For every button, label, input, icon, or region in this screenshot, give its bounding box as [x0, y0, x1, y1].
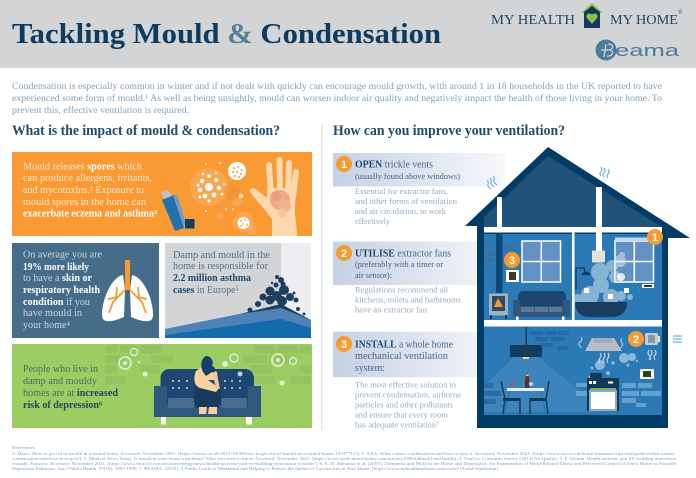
text: depression: People who live in	[23, 364, 98, 375]
logo: beama	[596, 40, 680, 60]
trickle vent	[615, 238, 654, 241]
pan	[590, 373, 602, 378]
step 1 heading: OPEN trickle vents	[355, 160, 433, 170]
text: asthma cases	[173, 250, 271, 296]
step 3 text	[355, 381, 461, 430]
step 2: utilise extractor fans: (preferably with a timer or	[355, 260, 443, 269]
text: skin or respiratory: respiratory health	[23, 285, 100, 296]
kitchen light cone	[484, 357, 605, 412]
text: spores: and mycotoxins.² Exposure to	[23, 185, 144, 196]
text: depression: damp and mouldy	[23, 376, 97, 387]
references: 1. Metro. How to get rid of mould in a rented home. Accessed: November 2021. [https://metro.co.uk/2021/10/30/how-to-get-rid-of-mould-in-a-rented-home-15537711/]; 2. AXA. What causes condensation and how to stop it. Accessed: November 2021. [https://www.axa.co.uk/home-insurance/tips-and-guides/what-causes-	[12, 451, 677, 456]
step 3 heading: system:	[355, 363, 385, 374]
text: spores: mould spores in the home can	[23, 197, 146, 208]
step 1 text: and air circulation, to work	[355, 207, 447, 216]
text: depression: risk of depression⁶	[23, 400, 102, 411]
logo: my health my home: ®	[678, 9, 683, 16]
step 2 heading: UTILISE extractor fans	[355, 249, 451, 260]
text: skin or respiratory: have mould in	[23, 308, 82, 319]
step 1 text: effectively	[355, 217, 391, 226]
lamp	[510, 327, 542, 359]
logo: my health my home: MY HEALTH	[491, 13, 575, 28]
text: depression	[23, 364, 118, 411]
text: spores: can produce allergens, irritants,	[23, 173, 152, 184]
references: crusade. Euractiv. Accessed: November 2021. [https://www.euractiv.com/section/energy/news/health-activists-join-eu-building-renovation-crusade/]; 6. E. D. Shenassa et al. (2007). Dampness and Mold in the Home and Depression: An Examination of Mold-Related Illness and Perceived Control of One's Home as Possible	[12, 461, 676, 466]
step 3 heading	[355, 340, 453, 374]
step 2 text	[355, 286, 461, 315]
oven	[587, 378, 619, 411]
thermostat	[640, 369, 654, 379]
illustration: mouldy roof	[165, 275, 311, 338]
badge 1	[336, 156, 352, 172]
badge 2	[336, 245, 352, 261]
step 2 text: kitchens, toilets and bathrooms	[355, 296, 461, 305]
dining set	[501, 373, 549, 415]
rooms	[484, 234, 662, 415]
references: References	[12, 445, 35, 450]
badge 3	[336, 336, 352, 352]
text: asthma cases: cases in Europe⁵	[173, 285, 239, 296]
sofa upper	[513, 291, 570, 320]
badges on house: 2	[633, 334, 639, 346]
logo: my health my home: MY HOME	[610, 13, 678, 28]
badge 3: 3	[341, 339, 347, 351]
step 2 text: Regulations recommend all	[355, 286, 449, 295]
icon: lungs	[102, 260, 153, 321]
heading: impact: What is the impact of mould & condensation?	[12, 123, 280, 139]
badges on house: 1	[652, 232, 658, 244]
step 3 text: has adequate ventilation⁷	[355, 421, 439, 430]
intro text: Condensation is especially common in winter and if not dealt with quickly can encourage mould growth, with around 1 in 18 households in the UK reported to have	[12, 81, 662, 92]
roof vents	[487, 167, 609, 189]
step 3 text: and ensure that every room	[355, 411, 449, 420]
text: skin or respiratory	[23, 250, 103, 331]
intro text: prevent this, effective ventilation is required.	[12, 105, 189, 116]
icon: hand with rash	[250, 160, 297, 236]
panel: 19% more likely blue	[12, 243, 159, 338]
badges on house: 3	[509, 255, 515, 267]
intro text	[12, 81, 662, 116]
right bricks	[576, 383, 661, 407]
icon: inhaler	[161, 190, 194, 231]
cooking steam	[588, 353, 638, 378]
logo: my health my home	[491, 3, 683, 28]
step 3 heading: INSTALL a whole home	[355, 340, 453, 351]
step 3: install mechanical ventilation	[333, 332, 505, 430]
step 2: utilise extractor fans	[333, 242, 505, 315]
text: spores	[23, 162, 157, 220]
house shell	[465, 147, 690, 428]
icon: person on sofa	[154, 356, 261, 424]
icon: house with heart	[581, 3, 603, 28]
bath steam	[572, 252, 633, 313]
bricks	[105, 345, 311, 384]
intro text: experienced some form of mould.¹ As well as being unsightly, mould can worsen indoor air quality and negatively impact the health of those living in your home. To	[12, 93, 662, 104]
badge 2: 2	[341, 248, 347, 260]
references: condensation-and-how-to-stop-it/]; 3. Medical News Today. Is mould in your house a problem? What you need to know. Accessed: November 2021. [https://www.medicalnewstoday.com/articles/288634#mold-and-health]; 4. YouGov Consumer Survey (2014) Air Quality; 5. E. Dronin. Health activists join EU building renovation	[12, 456, 677, 461]
text: spores: Mould releases spores which	[23, 162, 142, 172]
structure lines	[484, 187, 662, 326]
step 1 text	[355, 187, 457, 226]
windows	[522, 241, 654, 282]
panel: depression green	[12, 344, 312, 428]
bricks upper	[484, 246, 516, 262]
references: Depression Pathways. Am J Public Health. 97(10): 1893-1899; 7. BEAMA. (2020). A Public Guide to Ventilation and Helping to Reduce the Spread of Coronavirus in Your Home. [https://www.myhealthmyhome.com/covid-19-and-ventilation]	[12, 466, 499, 471]
title: Tackling Mould & Condensation	[12, 19, 441, 50]
shower	[576, 268, 585, 290]
logo: beama: eama	[615, 41, 680, 60]
panel: asthma grey	[165, 243, 311, 338]
badges on house	[504, 229, 663, 347]
spores	[119, 348, 296, 386]
step 1: open trickle vents: (usually found above windows)	[355, 172, 460, 181]
illustration: house cross-section	[465, 147, 690, 428]
extractor fan	[645, 333, 660, 345]
text: skin or respiratory: your home⁴	[23, 320, 71, 331]
vent unit and control	[592, 250, 605, 262]
text: asthma cases: Damp and mould in the	[173, 250, 271, 261]
step 1: open trickle vents	[333, 153, 505, 226]
badge 1: 1	[341, 159, 347, 171]
step 3 text: prevent condensation, airborne	[355, 391, 461, 400]
bath	[575, 302, 627, 317]
text: skin or respiratory: 19% more likely	[23, 262, 89, 273]
step 3 text: The most effective solution to	[355, 381, 456, 390]
icon: spores	[190, 162, 257, 235]
header band	[0, 0, 696, 68]
attic	[484, 156, 662, 230]
stove	[489, 285, 508, 319]
text: skin or respiratory: On average you are	[23, 250, 103, 261]
step 1 text: Essential for extractor fans,	[355, 187, 448, 196]
heading: improve ventilation: How can you improve your ventilation?	[333, 123, 565, 139]
text: depression: homes are at increased	[23, 388, 118, 399]
step 3 text: particles and other pollutants	[355, 401, 453, 410]
references	[12, 445, 677, 471]
text: asthma cases: home is responsible for	[173, 261, 269, 272]
step 3 heading: mechanical ventilation	[355, 351, 449, 362]
step 1 text: and other forms of ventilation	[355, 197, 457, 206]
text: skin or respiratory: condition if you	[23, 297, 90, 308]
step 2: utilise extractor fans: air sensor):	[355, 271, 392, 280]
cooker hood	[579, 337, 623, 363]
step 2 text: have an extractor fan	[355, 306, 427, 315]
kitchen bricks	[484, 331, 569, 404]
text: asthma cases: 2.2 million asthma	[173, 273, 251, 284]
text: spores: exacerbate eczema and asthma³	[23, 208, 157, 220]
text: skin or respiratory: to have a skin or	[23, 273, 93, 284]
panel: spores orange	[12, 152, 312, 236]
